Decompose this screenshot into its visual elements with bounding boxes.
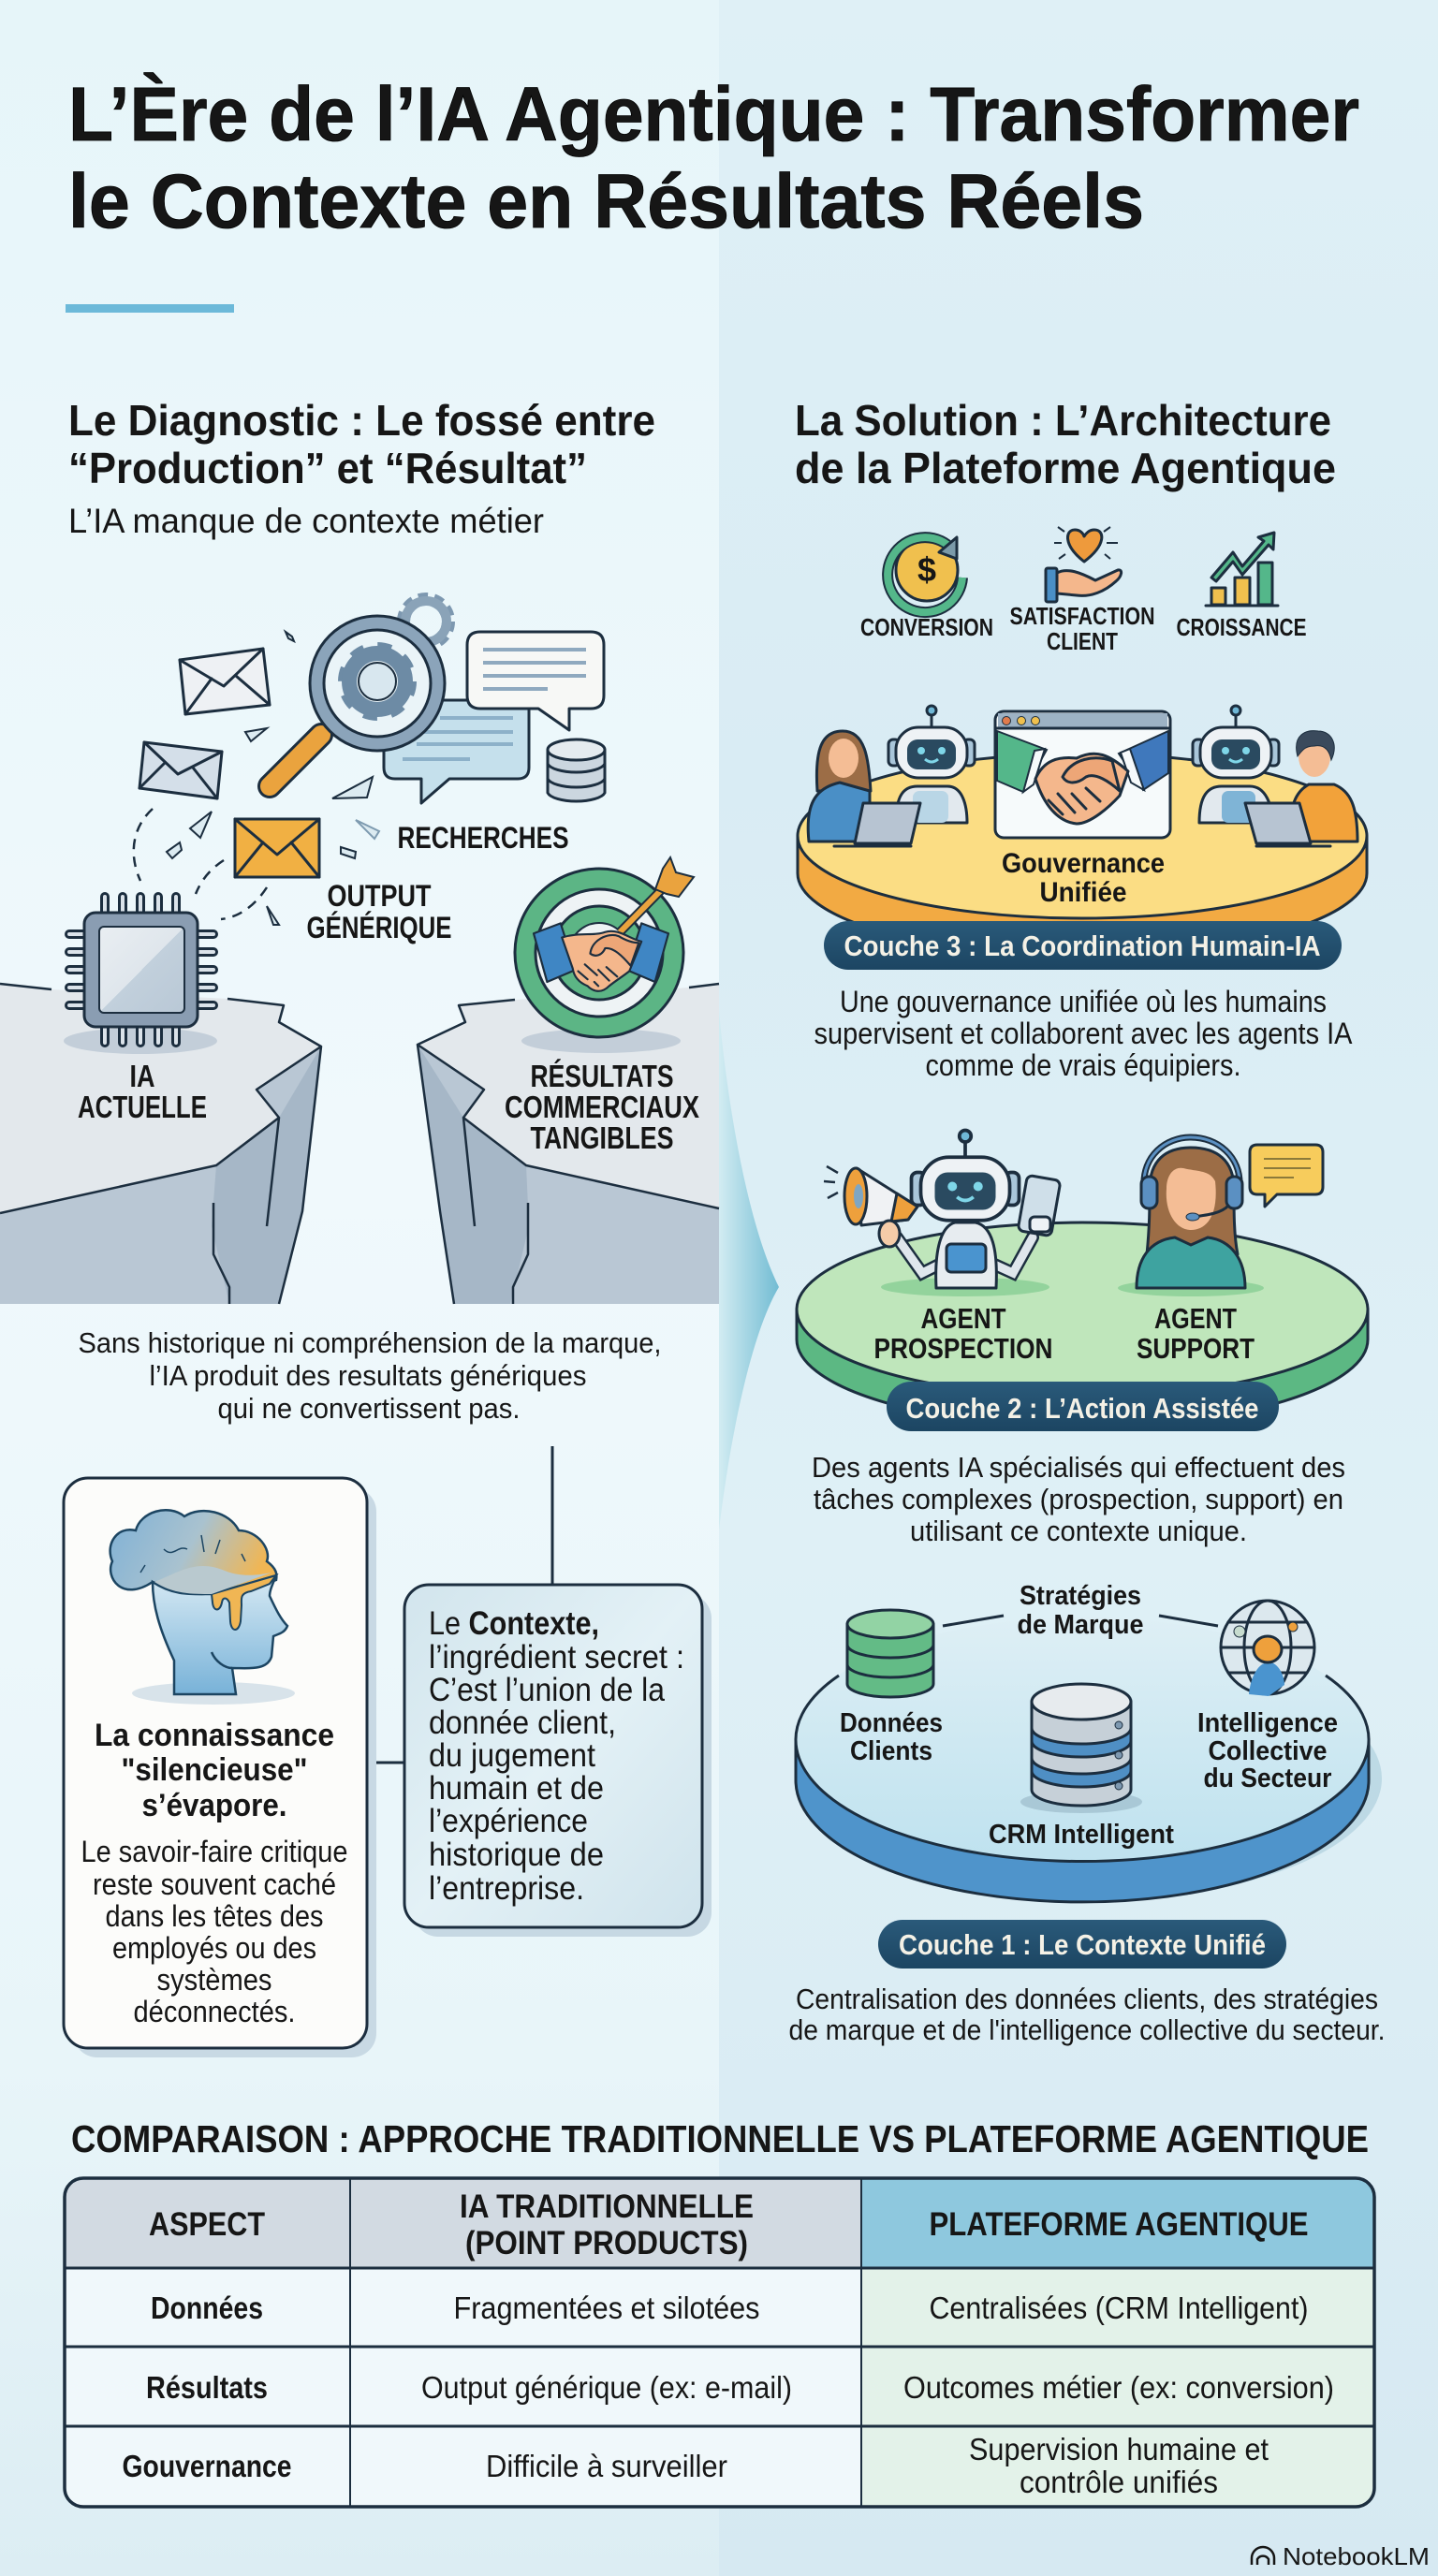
row: donnees: Fragmentées et silotées (453, 2291, 760, 2325)
text: silent knowledge body (81, 1835, 348, 2028)
text: couche 1 description (788, 1983, 1386, 2046)
heading: diagnostic: Le Diagnostic : Le fossé entre (68, 396, 655, 445)
pill: couche 3 (824, 921, 1342, 970)
row: donnees: Données (151, 2291, 263, 2325)
layer 3: human-AI coordination (798, 706, 1367, 1082)
title: le Contexte en Résultats Réels (68, 159, 1144, 244)
logo: NotebookLM: NotebookLM (1283, 2542, 1430, 2570)
text: couche 2 description (812, 1451, 1345, 1547)
panel: context (404, 1585, 712, 1937)
row: gouvernance (122, 2432, 1269, 2499)
label: recherches: RECHERCHES (397, 821, 569, 855)
text: gap explanation: qui ne convertissent pas. (217, 1392, 521, 1425)
labels: outcomes: CONVERSION (860, 613, 993, 641)
subtitle: diagnostic: L’IA manque de contexte métier (68, 502, 544, 540)
row: resultats: Résultats (146, 2370, 268, 2405)
outcomes row (860, 527, 1307, 655)
pill: couche 2: Couche 2 : L’Action Assistée (906, 1392, 1258, 1425)
label: output generique: OUTPUT (328, 879, 432, 913)
row: gouvernance: contrôle unifiés (1020, 2465, 1218, 2499)
label: gouvernance unifiee: Gouvernance (1002, 848, 1165, 879)
text: silent knowledge body: déconnectés. (133, 1995, 296, 2028)
icon: orange envelope (235, 819, 319, 877)
text: couche 3 description (814, 985, 1353, 1082)
text: couche 3 description: Une gouvernance unifiée où les humains (840, 985, 1327, 1018)
icon: chip, current AI (64, 897, 217, 1054)
label: agent support (1137, 1302, 1255, 1365)
label: intelligence collective: Collective (1208, 1736, 1328, 1766)
figure: prospection robot (824, 1131, 1061, 1296)
icon: blue speech bubble (384, 700, 529, 803)
icon: envelope 2 (139, 742, 222, 798)
layer 2: assisted action (797, 1131, 1368, 1547)
icon: heart in hand (1046, 527, 1122, 602)
background: right panel (719, 0, 1438, 2576)
text: silent knowledge body: dans les têtes des (105, 1899, 324, 1933)
dashed trajectories (134, 809, 267, 919)
title (68, 72, 1359, 244)
text: context definition: historique de (429, 1837, 604, 1873)
text: context definition: l’entreprise. (429, 1870, 584, 1907)
figure: woman and robot (808, 706, 975, 846)
label: IA actuelle: ACTUELLE (78, 1090, 207, 1124)
background: left panel (0, 0, 719, 2576)
text: couche 1 description: Centralisation des données clients, des stratégies (796, 1983, 1378, 2015)
label: intelligence collective: du Secteur (1204, 1764, 1331, 1793)
icon: conversion: $ (917, 550, 936, 589)
text: context definition: du jugement (429, 1737, 595, 1774)
icon: yellow speech bubble (1250, 1145, 1323, 1207)
figure: support agent (1118, 1137, 1264, 1296)
label: output generique: GÉNÉRIQUE (307, 911, 451, 944)
label: gouvernance unifiee (1002, 848, 1165, 908)
icon: growth (1206, 533, 1278, 606)
row: donnees: Centralisées (CRM Intelligent) (929, 2291, 1309, 2325)
heading: diagnostic: “Production” et “Résultat” (68, 444, 587, 492)
header row: IA TRADITIONNELLE (460, 2188, 754, 2225)
text: couche 1 description: de marque et de l'intelligence collective du secteur. (788, 2013, 1386, 2046)
cliff: left (0, 984, 321, 1304)
heading: silent knowledge (95, 1718, 334, 1823)
icon: small gear (404, 599, 448, 644)
comparison table (65, 2178, 1374, 2507)
text: couche 3 description: supervisent et collaborent avec les agents IA (814, 1017, 1353, 1050)
icon: green database (847, 1610, 933, 1697)
text: silent knowledge body: reste souvent caché (93, 1867, 336, 1901)
heading: solution (795, 396, 1336, 492)
row: resultats (146, 2370, 1334, 2405)
pill: couche 2 (887, 1382, 1279, 1431)
text: context definition: donnée client, (429, 1705, 616, 1741)
label: agent support: AGENT (1154, 1302, 1237, 1335)
text: context definition (429, 1605, 684, 1907)
label: gouvernance unifiee: Unifiée (1039, 877, 1127, 908)
label: output generique (307, 879, 451, 944)
label: resultats commerciaux tangibles: TANGIBLES (530, 1120, 674, 1155)
text: context definition: l’ingrédient secret : (429, 1639, 684, 1676)
labels: outcomes: CLIENT (1047, 627, 1118, 655)
table grid (65, 2178, 1374, 2507)
text: context definition: humain et de (429, 1770, 604, 1807)
text: silent knowledge body: employés ou des (112, 1931, 316, 1965)
header row (149, 2188, 1309, 2261)
label: donnees clients (840, 1708, 943, 1766)
heading: silent knowledge: s’évapore. (142, 1788, 286, 1823)
row: resultats: Output générique (ex: e-mail) (421, 2370, 792, 2405)
text: gap explanation: l’IA produit des resultats génériques (150, 1359, 586, 1392)
label: intelligence collective (1197, 1708, 1338, 1793)
label: intelligence collective: Intelligence (1197, 1708, 1338, 1738)
label: CRM intelligent: CRM Intelligent (989, 1820, 1174, 1850)
row: gouvernance: Difficile à surveiller (486, 2449, 727, 2483)
header row: PLATEFORME AGENTIQUE (929, 2206, 1309, 2243)
text: couche 2 description: utilisant ce contexte unique. (910, 1515, 1247, 1547)
disc: blue (796, 1616, 1382, 1902)
icon: handshake window (995, 711, 1170, 838)
text: context definition: C’est l’union de la (429, 1672, 665, 1708)
text: gap explanation (79, 1326, 661, 1425)
heading: diagnostic (68, 396, 655, 492)
row: resultats: Outcomes métier (ex: conversion) (903, 2370, 1334, 2405)
heading: solution: La Solution : L’Architecture (795, 396, 1331, 445)
layer 1: unified context (788, 1581, 1386, 2046)
icon: conversion (888, 537, 962, 612)
pill: couche 1 (878, 1920, 1286, 1969)
labels: outcomes: SATISFACTION (1009, 602, 1155, 630)
heading: solution: de la Plateforme Agentique (795, 444, 1336, 492)
cliff: right (418, 984, 719, 1304)
row: donnees (151, 2291, 1309, 2325)
label: strategies de marque (1017, 1581, 1144, 1640)
label: agent support: SUPPORT (1137, 1332, 1255, 1365)
arrow: from diagnosis to solution (719, 1011, 779, 1530)
icon: envelope 1 (180, 649, 270, 714)
shards (167, 632, 379, 925)
figure: robot and man (1193, 706, 1357, 846)
pill: couche 1: Couche 1 : Le Contexte Unifié (899, 1928, 1266, 1961)
label: donnees clients: Clients (850, 1736, 932, 1766)
text: couche 2 description: tâches complexes (prospection, support) en (814, 1483, 1343, 1515)
icon: small database (548, 739, 605, 801)
accent bar under title (66, 304, 234, 313)
label: strategies de marque: Stratégies (1020, 1581, 1141, 1611)
label: donnees clients: Données (840, 1708, 943, 1738)
labels: outcomes: CROISSANCE (1176, 613, 1307, 641)
header row: (POINT PRODUCTS) (465, 2225, 748, 2261)
title: L’Ère de l’IA Agentique : Transformer (68, 72, 1359, 157)
label: strategies de marque: de Marque (1017, 1610, 1144, 1640)
panel: silent knowledge (64, 1478, 376, 2057)
heading: silent knowledge: "silencieuse" (122, 1752, 307, 1788)
illustration: the gap (0, 599, 719, 1304)
text: context definition: Le Contexte, (429, 1605, 599, 1642)
heading: silent knowledge: La connaissance (95, 1718, 334, 1753)
label: resultats commerciaux tangibles: COMMERCIAUX (505, 1090, 699, 1124)
connector lines (367, 1446, 552, 1763)
label: resultats commerciaux tangibles: RÉSULTATS (530, 1059, 674, 1093)
disc: green (797, 1222, 1368, 1427)
icon: white speech bubble (467, 632, 604, 730)
icon: CRM server (1020, 1684, 1142, 1813)
text: context definition: l’expérience (429, 1803, 588, 1839)
icon: magnifier (270, 616, 445, 786)
pill: couche 3: Couche 3 : La Coordination Humain-IA (844, 929, 1320, 962)
text: couche 2 description: Des agents IA spécialisés qui effectuent des (812, 1451, 1345, 1484)
label: agent prospection: AGENT (921, 1302, 1006, 1335)
label: IA actuelle: IA (129, 1059, 155, 1093)
text: silent knowledge body: Le savoir-faire critique (81, 1835, 348, 1868)
label: resultats commerciaux tangibles (505, 1059, 699, 1155)
text: silent knowledge body: systèmes (157, 1963, 271, 1997)
icon: head with melting brain (110, 1510, 295, 1705)
row: gouvernance: Supervision humaine et (969, 2432, 1269, 2466)
text: couche 3 description: comme de vrais équipiers. (925, 1048, 1241, 1082)
label: IA actuelle (78, 1059, 207, 1124)
icon: globe (1221, 1601, 1314, 1696)
row: gouvernance: Gouvernance (122, 2449, 292, 2483)
disc: yellow (798, 754, 1367, 956)
labels: outcomes (860, 602, 1307, 655)
label: agent prospection (874, 1302, 1052, 1365)
header row: ASPECT (149, 2206, 265, 2243)
label: agent prospection: PROSPECTION (874, 1332, 1052, 1365)
icon: target with handshake (515, 857, 694, 1053)
table cells (65, 2178, 1374, 2507)
text: gap explanation: Sans historique ni compréhension de la marque, (79, 1326, 661, 1359)
